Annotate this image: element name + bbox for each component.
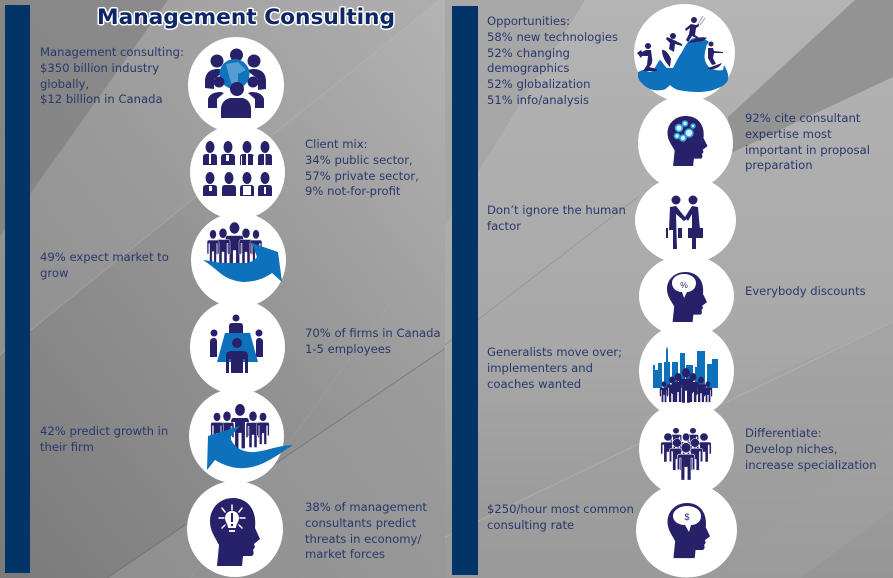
- text: generalists: [487, 345, 622, 391]
- left vertical bar: [5, 5, 30, 573]
- icon: client mix professionals: [203, 141, 272, 196]
- text: firm size: 1-5 employees: [305, 342, 391, 356]
- text: threats: consultants predict: [305, 516, 416, 530]
- text: opportunities: 58% new technologies: [487, 30, 618, 44]
- text: opportunities: 52% changing: [487, 46, 570, 60]
- text: consultant expertise: important in proposal: [745, 143, 870, 157]
- text: generalists: coaches wanted: [487, 377, 581, 391]
- text: threats: market forces: [305, 547, 385, 561]
- text: industry size: $12 billion in Canada: [40, 92, 163, 106]
- text: generalists: implementers and: [487, 361, 593, 375]
- icon: crowd: [661, 428, 711, 480]
- icon: head with percent bubble: %: [680, 280, 688, 290]
- text: opportunities: 51% info/analysis: [487, 93, 589, 107]
- text: differentiate: [745, 426, 877, 472]
- text: opportunities: [487, 14, 618, 107]
- text: human factor: factor: [487, 219, 521, 233]
- text: opportunities: 52% globalization: [487, 77, 590, 91]
- text: client mix: Client mix:: [305, 137, 368, 151]
- text: threats: 38% of management: [305, 500, 427, 514]
- text: client mix: [305, 137, 419, 198]
- icon: head with dollar bubble: [668, 503, 710, 558]
- icon: surfers on wave: [637, 16, 728, 92]
- text: consultant expertise: expertise most: [745, 127, 832, 141]
- text: firm growth: 42% predict growth in: [40, 424, 168, 438]
- text: market growth: 49% expect market to: [40, 250, 169, 264]
- text: consultant expertise: [745, 111, 870, 172]
- text: hourly rate: [487, 502, 634, 532]
- text: client mix: 9% not-for-profit: [305, 184, 400, 198]
- text: client mix: 57% private sector,: [305, 169, 419, 183]
- text: client mix: 34% public sector,: [305, 153, 413, 167]
- text: firm growth: [40, 424, 168, 454]
- text: generalists: Generalists move over;: [487, 345, 622, 359]
- text: industry size: globally,: [40, 77, 89, 91]
- icon: handshake: [666, 196, 703, 249]
- text: industry size: $350 billion industry: [40, 61, 159, 75]
- icon: head with lightbulb: [210, 498, 260, 566]
- text: market growth: [40, 250, 169, 280]
- text: opportunities: Opportunities:: [487, 14, 570, 28]
- left half background: [0, 0, 450, 578]
- text: human factor: [487, 203, 626, 233]
- right vertical bar: [452, 6, 478, 575]
- icon: team around globe: [205, 48, 266, 118]
- text: firm growth: their firm: [40, 440, 94, 454]
- icon: head with gears: [668, 116, 708, 166]
- text: industry size: [40, 45, 184, 106]
- text: consultant expertise: 92% cite consultant: [745, 111, 860, 125]
- text: hourly rate: $250/hour most common: [487, 502, 634, 516]
- circle column right: [634, 4, 737, 578]
- text: human factor: Don’t ignore the human: [487, 203, 626, 217]
- icon: head with percent bubble: [667, 272, 707, 322]
- title: Management Consulting: [97, 5, 395, 30]
- icon: firm growth arrow left: [207, 404, 293, 470]
- text: differentiate: Develop niches,: [745, 442, 838, 456]
- text: consultant expertise: preparation: [745, 158, 813, 172]
- circle column left: [187, 37, 286, 577]
- icon: head with dollar bubble: $: [684, 512, 690, 522]
- text: threats: threats in economy/: [305, 532, 421, 546]
- icon: small firm around table: [210, 314, 263, 373]
- icon: market growth arrow right: [203, 222, 282, 282]
- right half background: [445, 0, 893, 578]
- text: market growth: grow: [40, 266, 68, 280]
- text: discounts: Everybody discounts: [745, 284, 866, 298]
- text: hourly rate: consulting rate: [487, 518, 574, 532]
- text: differentiate: increase specialization: [745, 458, 877, 472]
- text: firm size: 70% of firms in Canada: [305, 326, 441, 340]
- text: threats: [305, 500, 427, 561]
- text: differentiate: Differentiate:: [745, 426, 822, 440]
- icon: city skyline with people: [653, 346, 718, 403]
- text: industry size: Management consulting:: [40, 45, 184, 59]
- text: firm size: [305, 326, 441, 356]
- text: opportunities: demographics: [487, 61, 569, 75]
